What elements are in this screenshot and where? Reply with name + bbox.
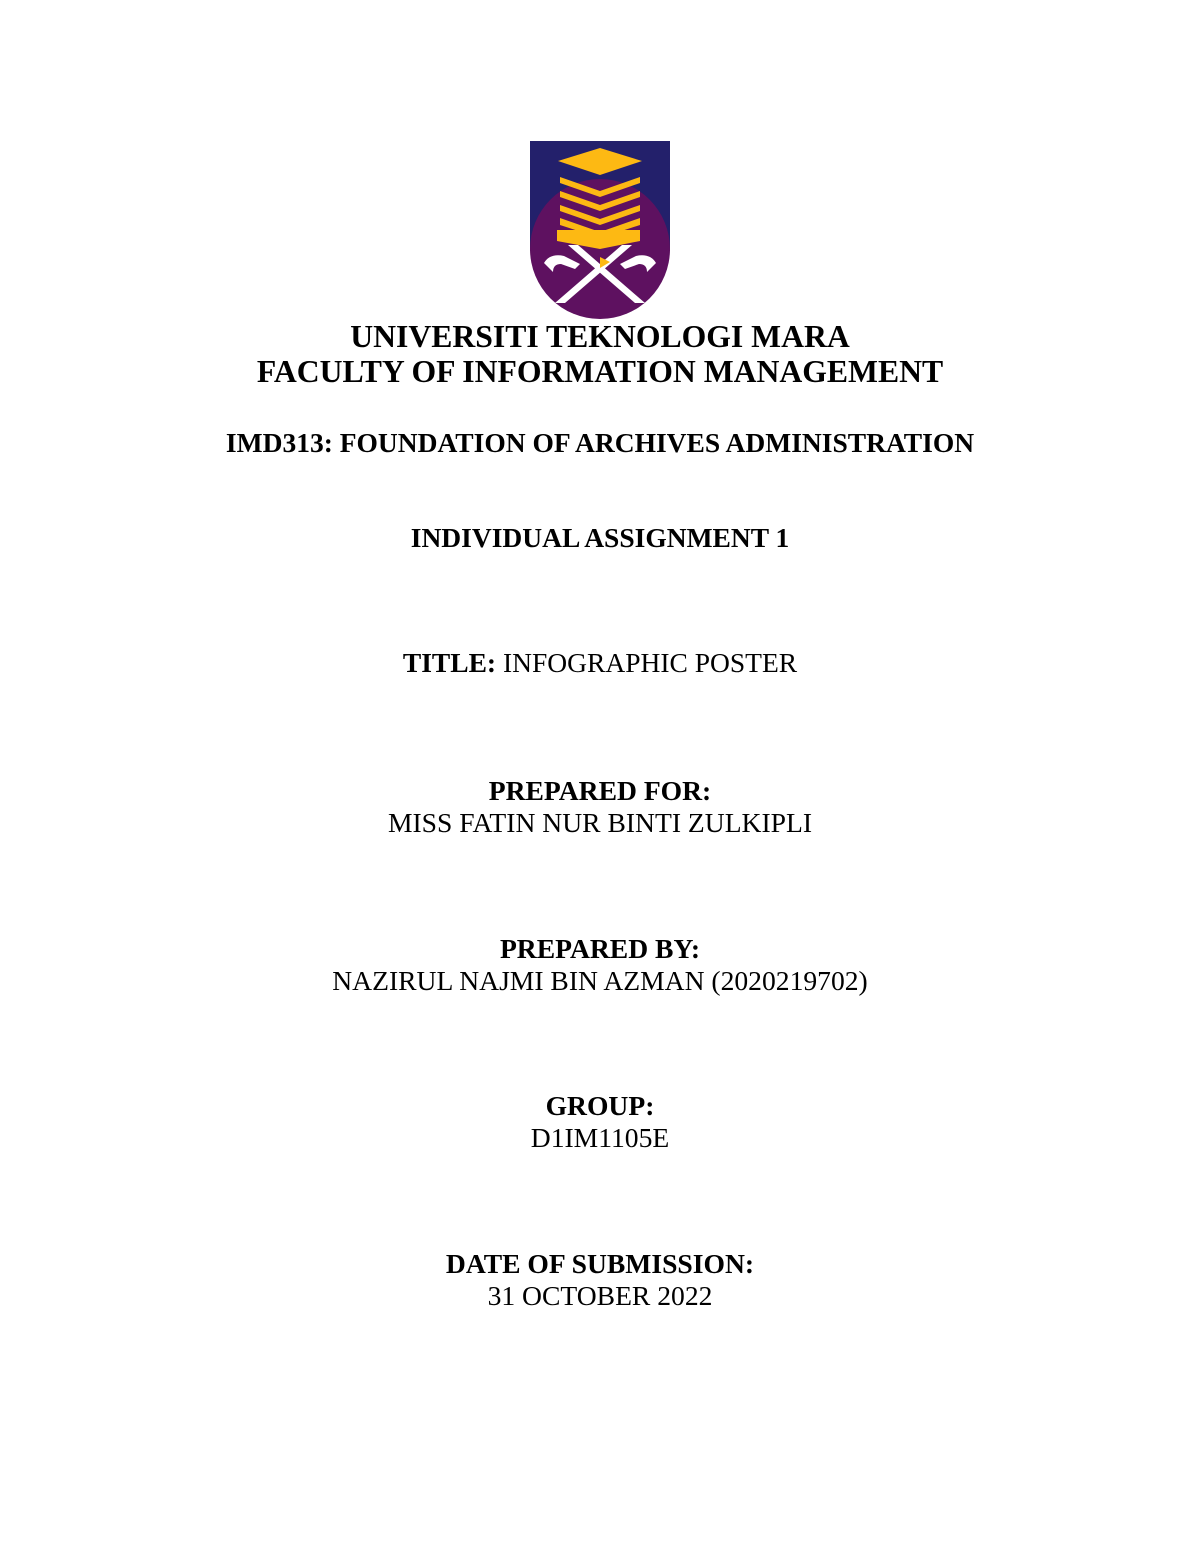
logo: [530, 141, 670, 319]
prepared for: PREPARED FOR:: [489, 775, 711, 806]
prepared by: [332, 933, 868, 996]
group: [531, 1090, 669, 1153]
group: D1IM1105E: [531, 1122, 669, 1153]
group: GROUP:: [546, 1090, 654, 1121]
date: DATE OF SUBMISSION:: [446, 1248, 754, 1279]
prepared for: MISS FATIN NUR BINTI ZULKIPLI: [388, 807, 812, 838]
heading: university: UNIVERSITI TEKNOLOGI MARA: [350, 319, 850, 354]
date: [446, 1248, 754, 1311]
prepared for: [388, 775, 812, 838]
date: 31 OCTOBER 2022: [488, 1280, 712, 1311]
heading: faculty: FACULTY OF INFORMATION MANAGEMENT: [257, 354, 943, 389]
prepared by: NAZIRUL NAJMI BIN AZMAN (2020219702): [332, 965, 868, 996]
prepared by: PREPARED BY:: [500, 933, 700, 964]
title: TITLE: INFOGRAPHIC POSTER: [403, 647, 797, 678]
course: IMD313: FOUNDATION OF ARCHIVES ADMINISTRATION: [226, 427, 974, 458]
assignment: INDIVIDUAL ASSIGNMENT 1: [411, 522, 789, 553]
